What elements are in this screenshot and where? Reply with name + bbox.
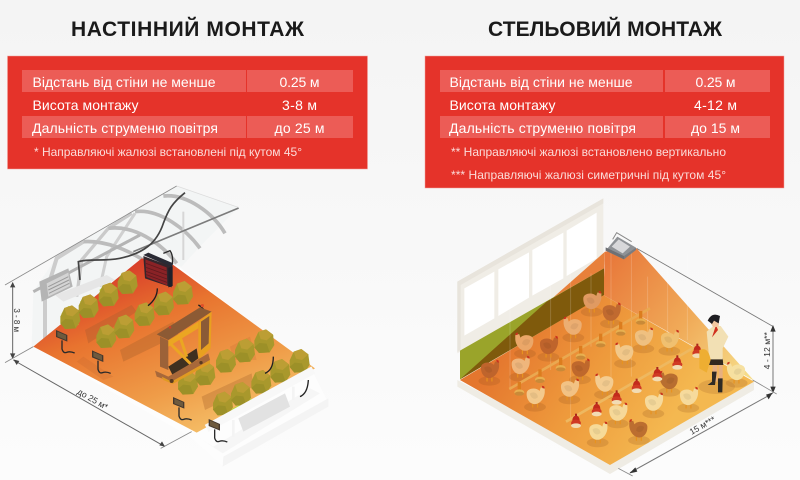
panel: wall mounting specs: Відстань від стіни не менше [32, 74, 216, 90]
panel: ceiling mounting specs: Відстань від стіни не менше [450, 74, 633, 90]
heat cone on back wall [460, 248, 754, 381]
panel: ceiling mounting specs: Висота монтажу [450, 97, 556, 113]
dimension: height: 4 - 12 м** [762, 331, 772, 369]
wall fan unit [39, 268, 115, 302]
farmer [698, 315, 735, 394]
panel: wall mounting specs: * Направляючі жалюзі встановлені під кутом 45° [34, 145, 302, 159]
hens [478, 291, 748, 447]
wall-mounted heater [143, 251, 173, 306]
window wall [457, 198, 603, 353]
room base [457, 380, 754, 474]
control boxes [56, 330, 227, 442]
feeder line: orange [509, 308, 650, 396]
dimension: range [13, 359, 192, 448]
panel: ceiling mounting specs: ** Направляючі жалюзі встановлено вертикально [451, 145, 726, 159]
dimension: height [5, 282, 33, 363]
illustration: poultry house with ceiling heater [457, 198, 777, 476]
feeder line: red [566, 344, 702, 428]
greenhouse frame [5, 186, 239, 347]
ceiling heater [606, 233, 636, 259]
panel: ceiling mounting specs: 0.25 м [696, 74, 736, 90]
plants [60, 270, 310, 415]
heading: ceiling mounting: СТЕЛЬОВИЙ МОНТАЖ [488, 17, 723, 41]
heading: wall mounting: НАСТІННИЙ МОНТАЖ [71, 17, 305, 41]
dimension: height [637, 248, 777, 394]
panel: ceiling mounting specs [425, 56, 784, 188]
panel: ceiling mounting specs: *** Направляючі жалюзі симетричні під кутом 45° [451, 168, 726, 182]
panel: wall mounting specs: 0.25 м [280, 74, 320, 90]
dimension: range: 15 м*** [688, 414, 718, 437]
room floor [460, 295, 754, 465]
panel: wall mounting specs: Дальність струменю повітря [32, 120, 218, 136]
dimension: range: до 25 м* [76, 386, 110, 412]
illustration: greenhouse with wall-mounted heater [5, 186, 328, 467]
green wall strip [460, 268, 604, 379]
floor slab [33, 258, 328, 467]
panel: wall mounting specs [8, 56, 368, 169]
dimension: height: 3 - 8 м [12, 308, 21, 332]
raised beds [77, 305, 257, 410]
panel: ceiling mounting specs: 4-12 м [694, 97, 737, 113]
panel: wall mounting specs: до 25 м [274, 120, 324, 136]
panel: ceiling mounting specs: до 15 м [691, 120, 740, 136]
hanging lines [510, 220, 687, 420]
panel: wall mounting specs: Висота монтажу [32, 97, 138, 113]
dimension: range [618, 393, 773, 476]
machine cart [155, 304, 212, 384]
panel: wall mounting specs: 3-8 м [282, 97, 317, 113]
irrigation pipe [198, 305, 313, 437]
heated floor zone [33, 258, 315, 433]
panel: ceiling mounting specs: Дальність струменю повітря [449, 120, 636, 136]
